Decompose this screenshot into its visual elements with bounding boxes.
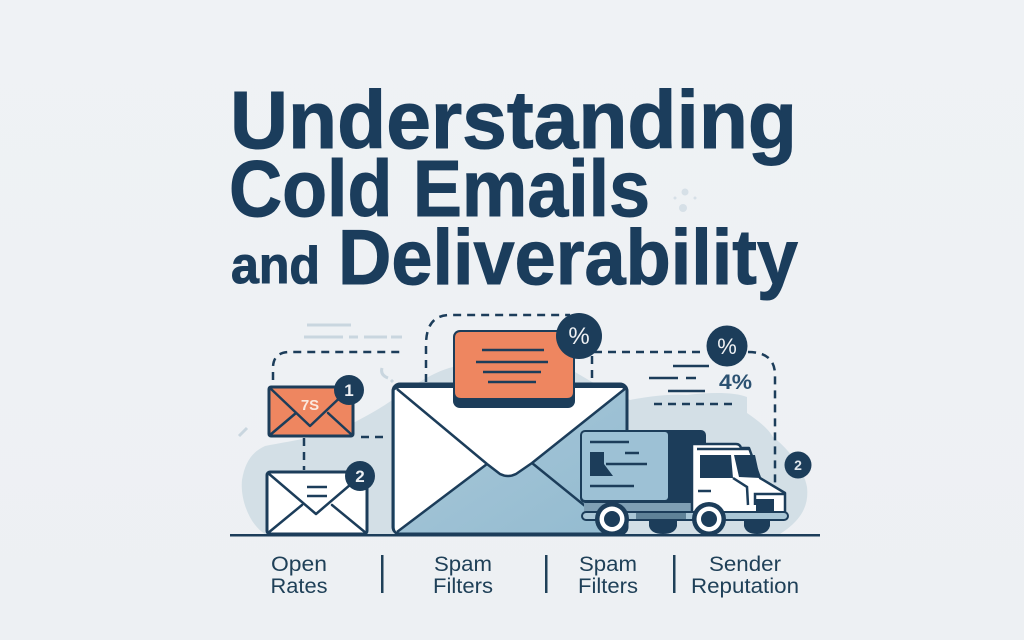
motion lines [649, 366, 709, 391]
title: and [231, 237, 320, 295]
orange message card [453, 330, 575, 408]
delivery truck [580, 430, 788, 536]
label: Spam Filters (second) [578, 553, 638, 598]
truck chassis [582, 512, 788, 520]
label: Open Rates [270, 553, 328, 598]
faint motion lines [239, 325, 402, 436]
label: Spam Filters: Filters [433, 575, 493, 598]
badge 2 [345, 461, 375, 491]
badge: small [784, 452, 812, 478]
large envelope [393, 383, 627, 534]
badge 1: 1 [344, 381, 354, 400]
percent badge right [706, 326, 748, 366]
rear wheels [595, 502, 677, 536]
label: Spam Filters (second): Filters [578, 575, 638, 598]
badge: small: 2 [794, 457, 802, 473]
ground line [230, 534, 820, 536]
title: Understanding [230, 75, 797, 166]
label: Spam Filters [433, 553, 493, 598]
title: Deliverability [338, 213, 798, 301]
percent badge on card: % [568, 323, 590, 350]
label: Open Rates: Rates [270, 575, 328, 598]
envelope: orange (1): 7S [301, 397, 319, 414]
front wheels [692, 502, 770, 536]
decorative dots [674, 188, 696, 212]
label dividers [381, 555, 676, 593]
truck cargo box [580, 430, 706, 512]
label: Sender Reputation [691, 553, 799, 598]
title [229, 75, 798, 301]
label: Open Rates: Open [271, 553, 327, 576]
truck cab [692, 444, 785, 514]
label: Sender Reputation: Sender [709, 553, 781, 576]
stat: 4%: 4% [719, 371, 752, 394]
envelope: orange (1) [269, 387, 353, 436]
label: Spam Filters: Spam [434, 553, 492, 576]
envelope: white (2) [267, 472, 367, 534]
percent badge right: % [717, 334, 737, 359]
dashed connectors [273, 315, 775, 485]
label: Spam Filters (second): Spam [579, 553, 637, 576]
badge 2: 2 [355, 467, 365, 486]
title: Cold Emails [229, 144, 650, 233]
badge 1 [334, 375, 364, 405]
background blob [242, 367, 807, 534]
label: Sender Reputation: Reputation [691, 575, 799, 598]
percent badge on card [556, 313, 602, 359]
